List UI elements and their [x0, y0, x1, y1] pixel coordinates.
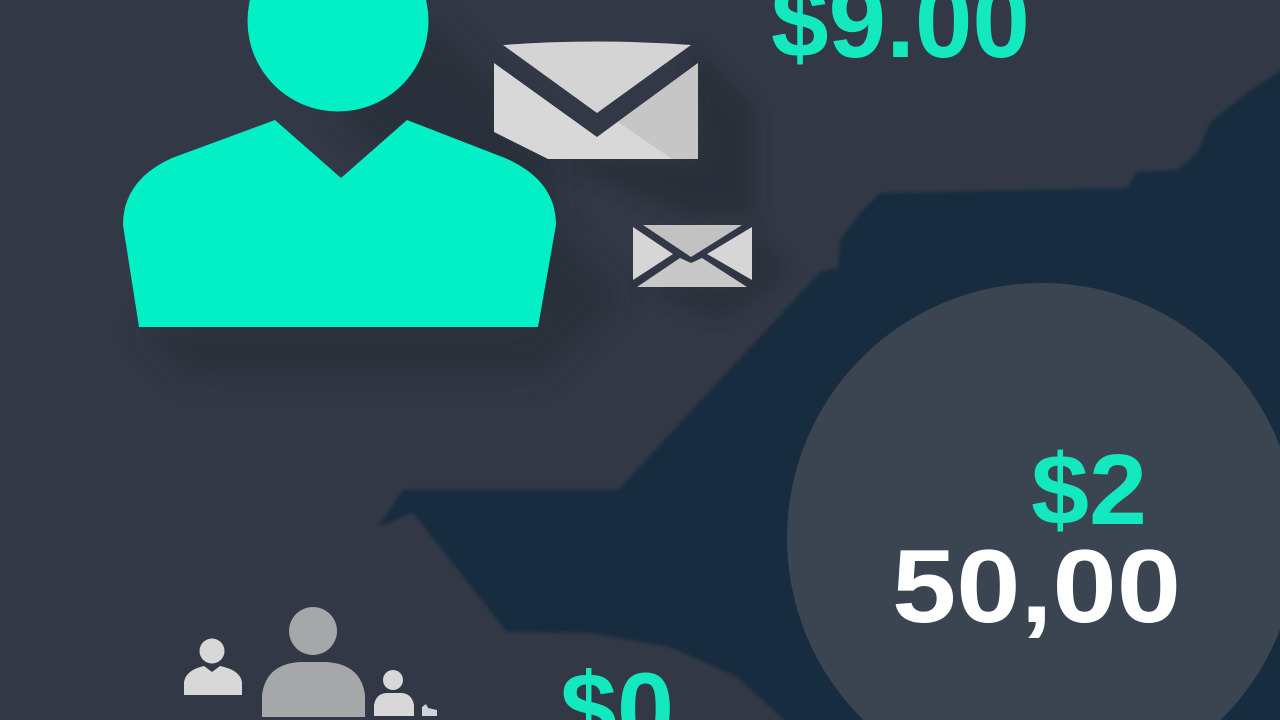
icon: small envelope	[633, 225, 752, 287]
shadow: large person	[139, 20, 620, 375]
envelope body	[494, 63, 698, 159]
shadow: small envelope	[637, 227, 790, 320]
panel: circle	[787, 283, 1280, 720]
body	[123, 120, 556, 327]
price: 50,00: 50,00	[892, 529, 1181, 645]
top flap	[643, 225, 742, 257]
left fold	[633, 227, 673, 280]
right fold	[707, 227, 752, 280]
icon: group of people	[184, 607, 437, 717]
tiny person	[422, 704, 437, 716]
icon: large person	[123, 0, 556, 327]
envelope flap	[503, 42, 691, 113]
large person centre	[262, 607, 365, 717]
price: $2: $2	[1031, 434, 1147, 546]
envelope fold shade	[618, 63, 698, 159]
shadow: large envelope	[548, 45, 755, 215]
head	[248, 0, 428, 112]
icon: large envelope	[494, 42, 698, 159]
small person left	[184, 638, 242, 695]
small person right	[374, 670, 414, 716]
bottom fold	[637, 258, 747, 287]
